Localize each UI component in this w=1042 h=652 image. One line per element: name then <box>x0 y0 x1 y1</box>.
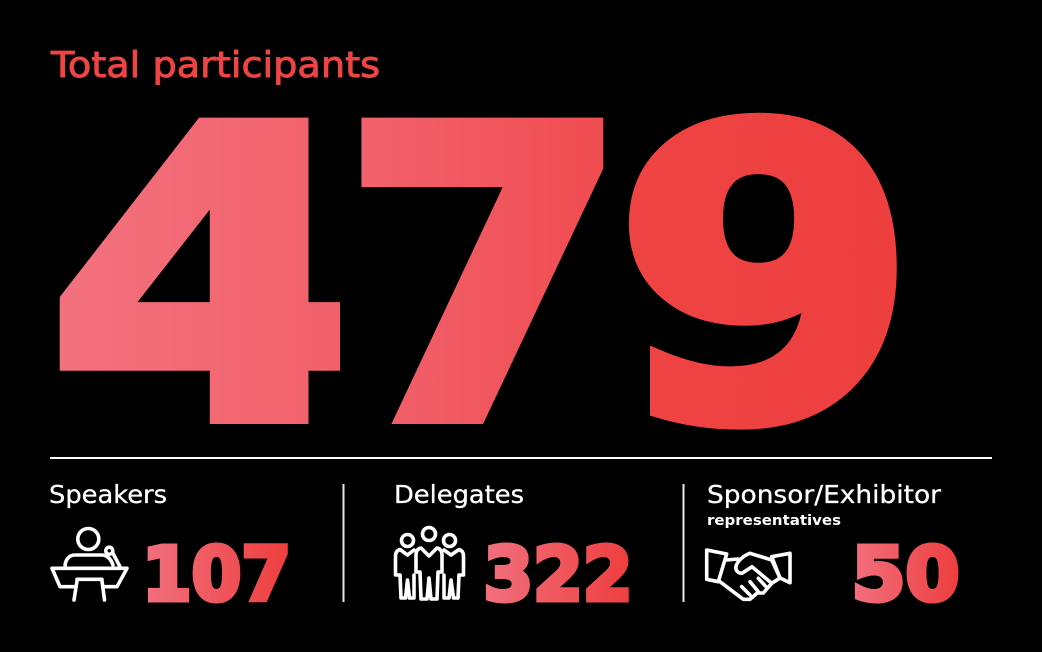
speakers count: 107 <box>142 532 291 618</box>
icon: group of delegates <box>396 528 464 599</box>
digit 7: 7 <box>341 45 629 512</box>
digit 9: 9 <box>614 45 917 512</box>
big number: 479 <box>60 112 897 430</box>
panel: delegates <box>394 480 632 618</box>
delegates count: 322 <box>484 532 632 618</box>
delegates label: Delegates <box>394 480 524 509</box>
panel: sponsor and exhibitor representatives <box>707 480 960 618</box>
sponsor count: 50 <box>852 532 960 618</box>
speakers label: Speakers <box>49 480 167 509</box>
panel: speakers <box>49 480 291 618</box>
sponsor label: Sponsor/Exhibitor <box>707 480 942 509</box>
title: Total participants <box>50 45 380 86</box>
representatives sublabel: representatives <box>707 513 841 529</box>
icon: handshake <box>707 550 790 599</box>
icon: speaker at podium <box>52 528 127 600</box>
digit 4: 4 <box>47 45 370 512</box>
